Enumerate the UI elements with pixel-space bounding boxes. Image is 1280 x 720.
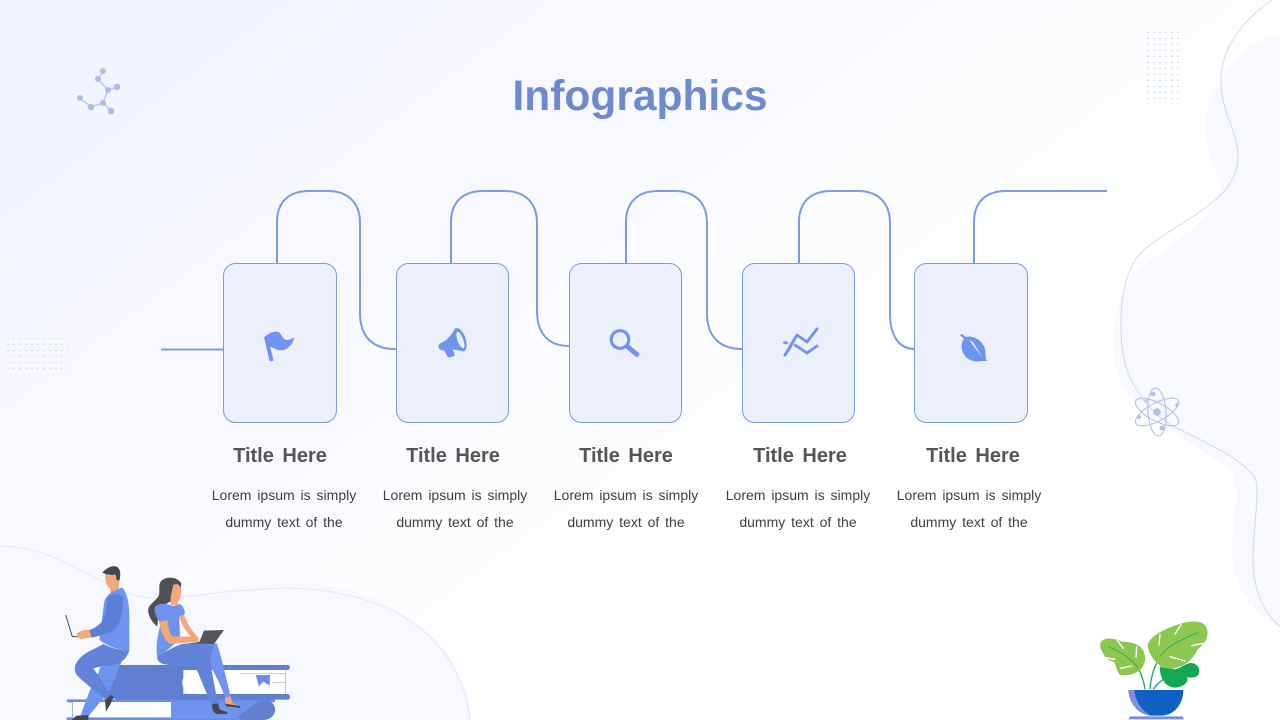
card 3 heading: Title Here [579,445,673,467]
card 2 text: Lorem ipsum is simply [383,487,527,503]
large leaf [1148,621,1208,669]
icon: flag [264,332,294,361]
icon: molecule [77,68,120,114]
decorative curve: right [1121,0,1280,627]
connector line [161,191,1107,350]
man [66,566,129,720]
pot highlight [1128,690,1152,716]
title: Infographics [512,73,768,120]
illustration: people on books [66,566,290,720]
pot [1128,690,1183,716]
card 1 text: dummy text of the [225,514,343,530]
card 3 text: dummy text of the [567,514,685,530]
card 5 [897,264,1041,530]
card 1 [212,264,356,530]
card 5 text: Lorem ipsum is simply [897,487,1041,503]
card 4 heading: Title Here [753,445,847,467]
plant stems [1138,657,1170,689]
background blob: bottom left [0,542,471,720]
card 4 [726,264,870,530]
card 1 text: Lorem ipsum is simply [212,487,356,503]
icon: megaphone [439,328,467,358]
illustration: potted plant [1100,621,1208,719]
card 2 [383,264,527,530]
background blob: right [1113,33,1280,627]
woman [148,578,240,714]
icon: magnifier [611,331,637,354]
decorative curve: bottom left [0,546,470,720]
dark leaf [1160,663,1199,688]
card 4 text: dummy text of the [739,514,857,530]
stack of books [67,665,290,720]
dot grid: left [3,338,68,373]
card 2 text: dummy text of the [396,514,514,530]
saucer [1128,716,1184,719]
dot grid: top right [1145,29,1179,101]
card 1 heading: Title Here [233,445,327,467]
left leaf [1100,639,1145,675]
card 5 text: dummy text of the [910,514,1028,530]
card 5 heading: Title Here [926,445,1020,467]
card 2 heading: Title Here [406,445,500,467]
card 4 text: Lorem ipsum is simply [726,487,870,503]
icon: atom [1132,387,1182,437]
icon: line chart [784,329,817,355]
card 3 text: Lorem ipsum is simply [554,487,698,503]
card 3 [554,264,698,530]
icon: leaf [960,334,987,361]
